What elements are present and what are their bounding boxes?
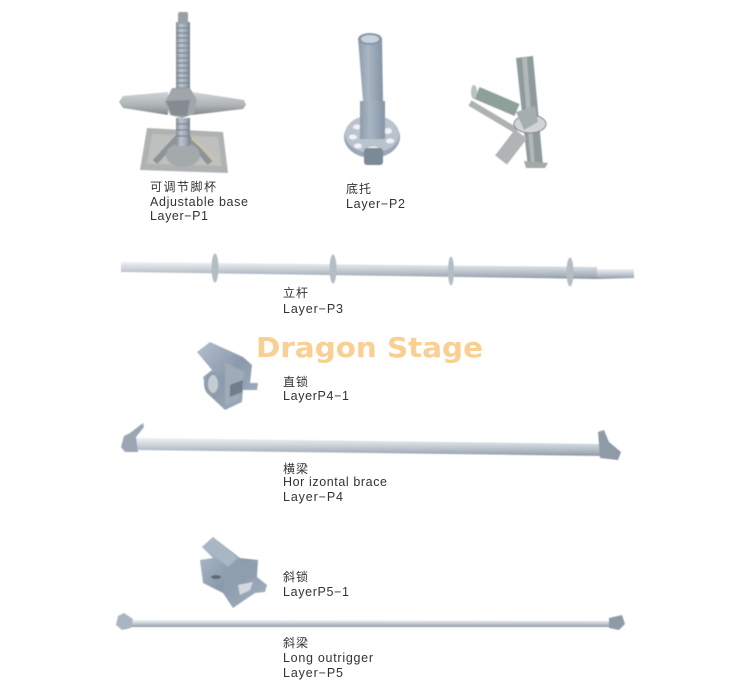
label: long outrigger: Layer−P5 xyxy=(283,666,343,680)
label: base collar: 底托 xyxy=(346,181,371,196)
watermark: Dragon Stage xyxy=(256,331,483,364)
label: horizontal brace xyxy=(283,461,387,504)
label: adjustable base xyxy=(150,179,248,223)
product: base collar P2 xyxy=(344,33,400,165)
label: straight lock: 直锁 xyxy=(283,374,308,389)
label: adjustable base: Layer−P1 xyxy=(150,209,208,223)
label: long outrigger: Long outrigger xyxy=(283,651,373,665)
label: long outrigger xyxy=(283,635,373,680)
label: vertical standard: Layer−P3 xyxy=(283,302,343,316)
product: horizontal brace P4 xyxy=(121,423,621,460)
photo: assembled node xyxy=(470,56,548,168)
label: diagonal lock: 斜锁 xyxy=(283,569,308,584)
label: horizontal brace: Layer−P4 xyxy=(283,490,343,504)
label: long outrigger: 斜梁 xyxy=(283,635,308,650)
product: straight lock P4-1 xyxy=(197,342,258,410)
label: vertical standard: 立杆 xyxy=(283,285,308,300)
label: adjustable base: 可调节脚杯 xyxy=(150,179,216,194)
label: vertical standard xyxy=(283,285,343,316)
label: horizontal brace: Hor izontal brace xyxy=(283,475,387,489)
label: straight lock xyxy=(283,374,349,403)
product: adjustable base P1 xyxy=(119,12,246,173)
product: long outrigger P5 xyxy=(116,613,625,630)
label: base collar: Layer−P2 xyxy=(346,197,405,211)
product: vertical standard P3 xyxy=(121,254,634,286)
label: adjustable base: Adjustable base xyxy=(150,195,248,209)
label: horizontal brace: 横梁 xyxy=(283,461,308,476)
label: diagonal lock xyxy=(283,569,349,599)
label: straight lock: LayerP4−1 xyxy=(283,389,349,403)
label: base collar xyxy=(346,181,405,211)
label: diagonal lock: LayerP5−1 xyxy=(283,585,349,599)
product: diagonal lock P5-1 xyxy=(200,537,267,608)
